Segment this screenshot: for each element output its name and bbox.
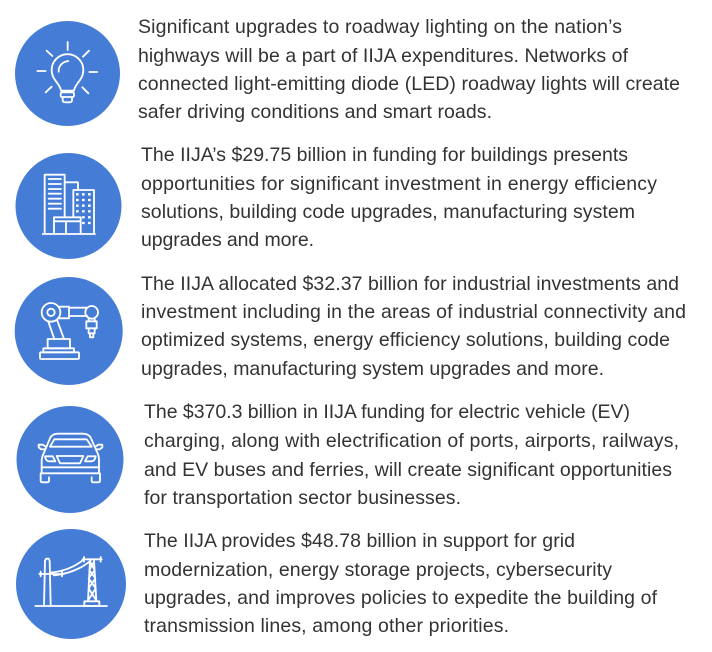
text: roadway lighting: safer driving conditions and smart roads.	[138, 101, 492, 123]
text: industrial: The IIJA allocated $32.37 billion for industrial investments and	[141, 273, 679, 295]
text: grid: The IIJA provides $48.78 billion in support for grid	[144, 530, 575, 552]
icon: transmission tower	[16, 529, 126, 639]
text: industrial: optimized systems, energy efficiency solutions, building code	[141, 329, 670, 351]
text: roadway lighting: Significant upgrades to roadway lighting on the nation’s	[138, 16, 622, 38]
icon: car	[16, 406, 124, 513]
text: buildings: upgrades and more.	[141, 229, 314, 251]
text: grid: transmission lines, among other priorities.	[144, 615, 509, 637]
text: industrial	[141, 273, 686, 380]
text: industrial: investment including in the areas of industrial connectivity and	[141, 301, 686, 323]
text: buildings: The IIJA’s $29.75 billion in funding for buildings presents	[141, 144, 628, 166]
text: transportation: and EV buses and ferries, will create significant opportunities	[144, 459, 672, 481]
text: grid: upgrades, and improves policies to expedite the building of	[144, 587, 658, 609]
text: transportation: for transportation sector businesses.	[144, 487, 461, 509]
text: industrial: upgrades, manufacturing system upgrades and more.	[141, 358, 604, 380]
icon: robotic arm	[15, 277, 123, 385]
text: roadway lighting: highways will be a part of IIJA expenditures. Networks of	[138, 45, 629, 67]
text: transportation	[144, 401, 679, 509]
icon: buildings	[16, 153, 122, 259]
text: buildings: opportunities for significant investment in energy efficiency	[141, 173, 657, 195]
text: roadway lighting: connected light-emitting diode (LED) roadway lights will create	[138, 73, 680, 95]
text: buildings	[141, 144, 657, 251]
text: roadway lighting	[138, 16, 680, 123]
text: grid	[144, 530, 658, 637]
text: grid: modernization, energy storage projects, cybersecurity	[144, 559, 612, 581]
icon: light bulb	[15, 21, 120, 126]
text: transportation: charging, along with electrification of ports, airports, railways,	[144, 430, 679, 452]
text: buildings: solutions, building code upgrades, manufacturing system	[141, 201, 635, 223]
text: transportation: The $370.3 billion in IIJA funding for electric vehicle (EV)	[144, 401, 630, 423]
